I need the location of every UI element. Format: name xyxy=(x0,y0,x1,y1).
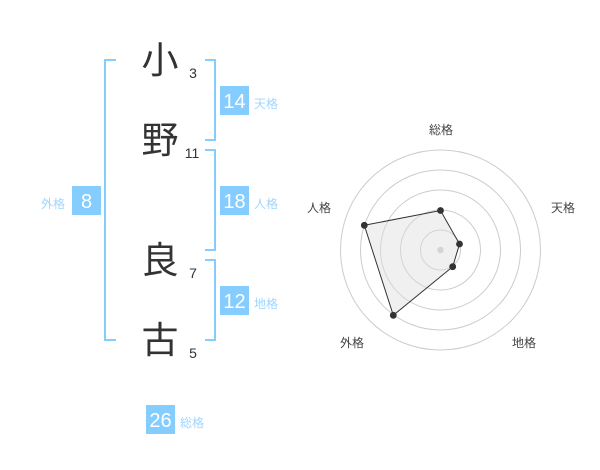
score: 天格 14: 14 xyxy=(223,91,246,113)
radar axis labels: 地格 xyxy=(512,335,536,350)
score: 外格 8: 8 xyxy=(81,191,92,213)
label: 人格: 人格 xyxy=(254,197,278,211)
kanji: 小: 小 xyxy=(142,40,178,81)
radar axis labels: 人格 xyxy=(307,200,331,215)
kanji: 古: 古 xyxy=(142,320,178,361)
label: 外格: 外格 xyxy=(41,197,65,211)
radar axis labels: 天格 xyxy=(551,200,575,215)
radar axis labels: 総格 xyxy=(429,122,453,137)
radar points xyxy=(361,207,463,319)
stroke count: 7: 7 xyxy=(189,265,197,281)
score: 地格 12 xyxy=(220,286,249,315)
label: 総格: 総格 xyxy=(180,416,204,430)
score: 地格 12: 12 xyxy=(223,291,246,313)
stroke count: 3: 3 xyxy=(189,65,197,81)
score: 天格 14 xyxy=(220,86,249,115)
label: 地格: 地格 xyxy=(254,297,278,311)
radar axis labels xyxy=(307,122,575,350)
kanji: 良: 良 xyxy=(142,240,178,281)
radar polygon xyxy=(364,210,460,315)
stroke count: 5: 5 xyxy=(189,345,197,361)
score: 総格 26: 26 xyxy=(149,410,172,432)
score: 外格 8 xyxy=(72,186,101,215)
score: 総格 26 xyxy=(146,405,175,434)
label: 天格: 天格 xyxy=(254,97,278,111)
score: 人格 18: 18 xyxy=(223,191,246,213)
radar axis labels: 外格 xyxy=(340,335,364,350)
kanji: 野: 野 xyxy=(142,120,178,161)
stroke count: 11: 11 xyxy=(185,145,199,161)
score: 人格 18 xyxy=(220,186,249,215)
